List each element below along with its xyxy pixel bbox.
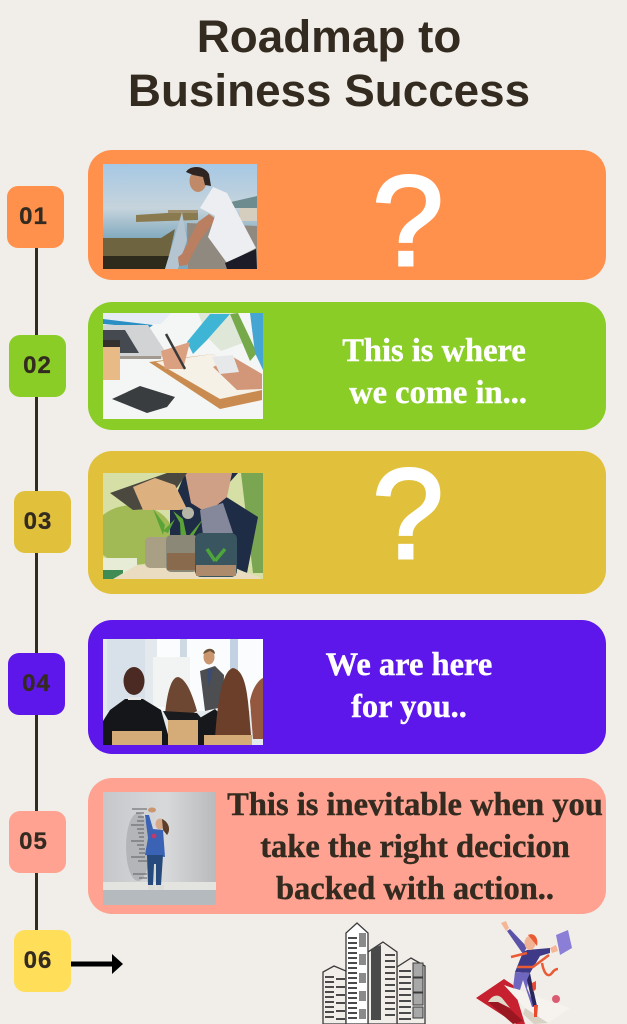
badge 03: 03 (24, 508, 52, 535)
title: Roadmap to (197, 11, 461, 62)
photo: business presentation (103, 639, 263, 745)
title (128, 11, 530, 116)
badge 02 (9, 335, 66, 397)
caption: this is inevitable: take the right decicion (260, 829, 570, 865)
caption: this is where we come in: we come in... (349, 375, 527, 411)
badge 01 (7, 186, 64, 248)
panel: step 5 (88, 778, 606, 914)
photo: coins and seedlings in jars (103, 473, 263, 579)
icon: city buildings (322, 922, 426, 1024)
badge 05: 05 (19, 828, 48, 855)
caption: we are here for you (326, 647, 492, 725)
caption: this is where we come in (342, 333, 527, 411)
badge 06 (14, 930, 71, 992)
badge 04 (8, 653, 65, 715)
badge 03 (14, 491, 71, 553)
panel: step 2 (88, 302, 606, 430)
badge 05 (9, 811, 66, 873)
caption: we are here for you: for you.. (351, 689, 467, 725)
illustration: businessman crossing finish line (476, 921, 572, 1024)
caption: this is where we come in: This is where (342, 333, 526, 369)
badge 02: 02 (23, 352, 52, 379)
caption: this is inevitable: backed with action.. (276, 871, 554, 907)
question mark: ? (372, 443, 444, 586)
caption: we are here for you: We are here (326, 647, 492, 683)
caption: this is inevitable (227, 787, 603, 907)
badge 06: 06 (24, 947, 52, 974)
photo: desk with notebook (103, 313, 263, 419)
panel: step 1 (88, 150, 606, 280)
panel: step 4 (88, 620, 606, 754)
badge 01: 01 (19, 203, 48, 230)
arrow: step 06 (71, 954, 123, 974)
photo: child measuring height (103, 792, 216, 905)
timeline line (34, 240, 38, 935)
badge 04: 04 (22, 670, 51, 697)
title: Business Success (128, 65, 530, 116)
caption: this is inevitable: This is inevitable when you (227, 787, 603, 823)
question mark: ? (372, 150, 444, 293)
photo: man on pier (103, 164, 257, 269)
panel: step 3 (88, 451, 606, 594)
